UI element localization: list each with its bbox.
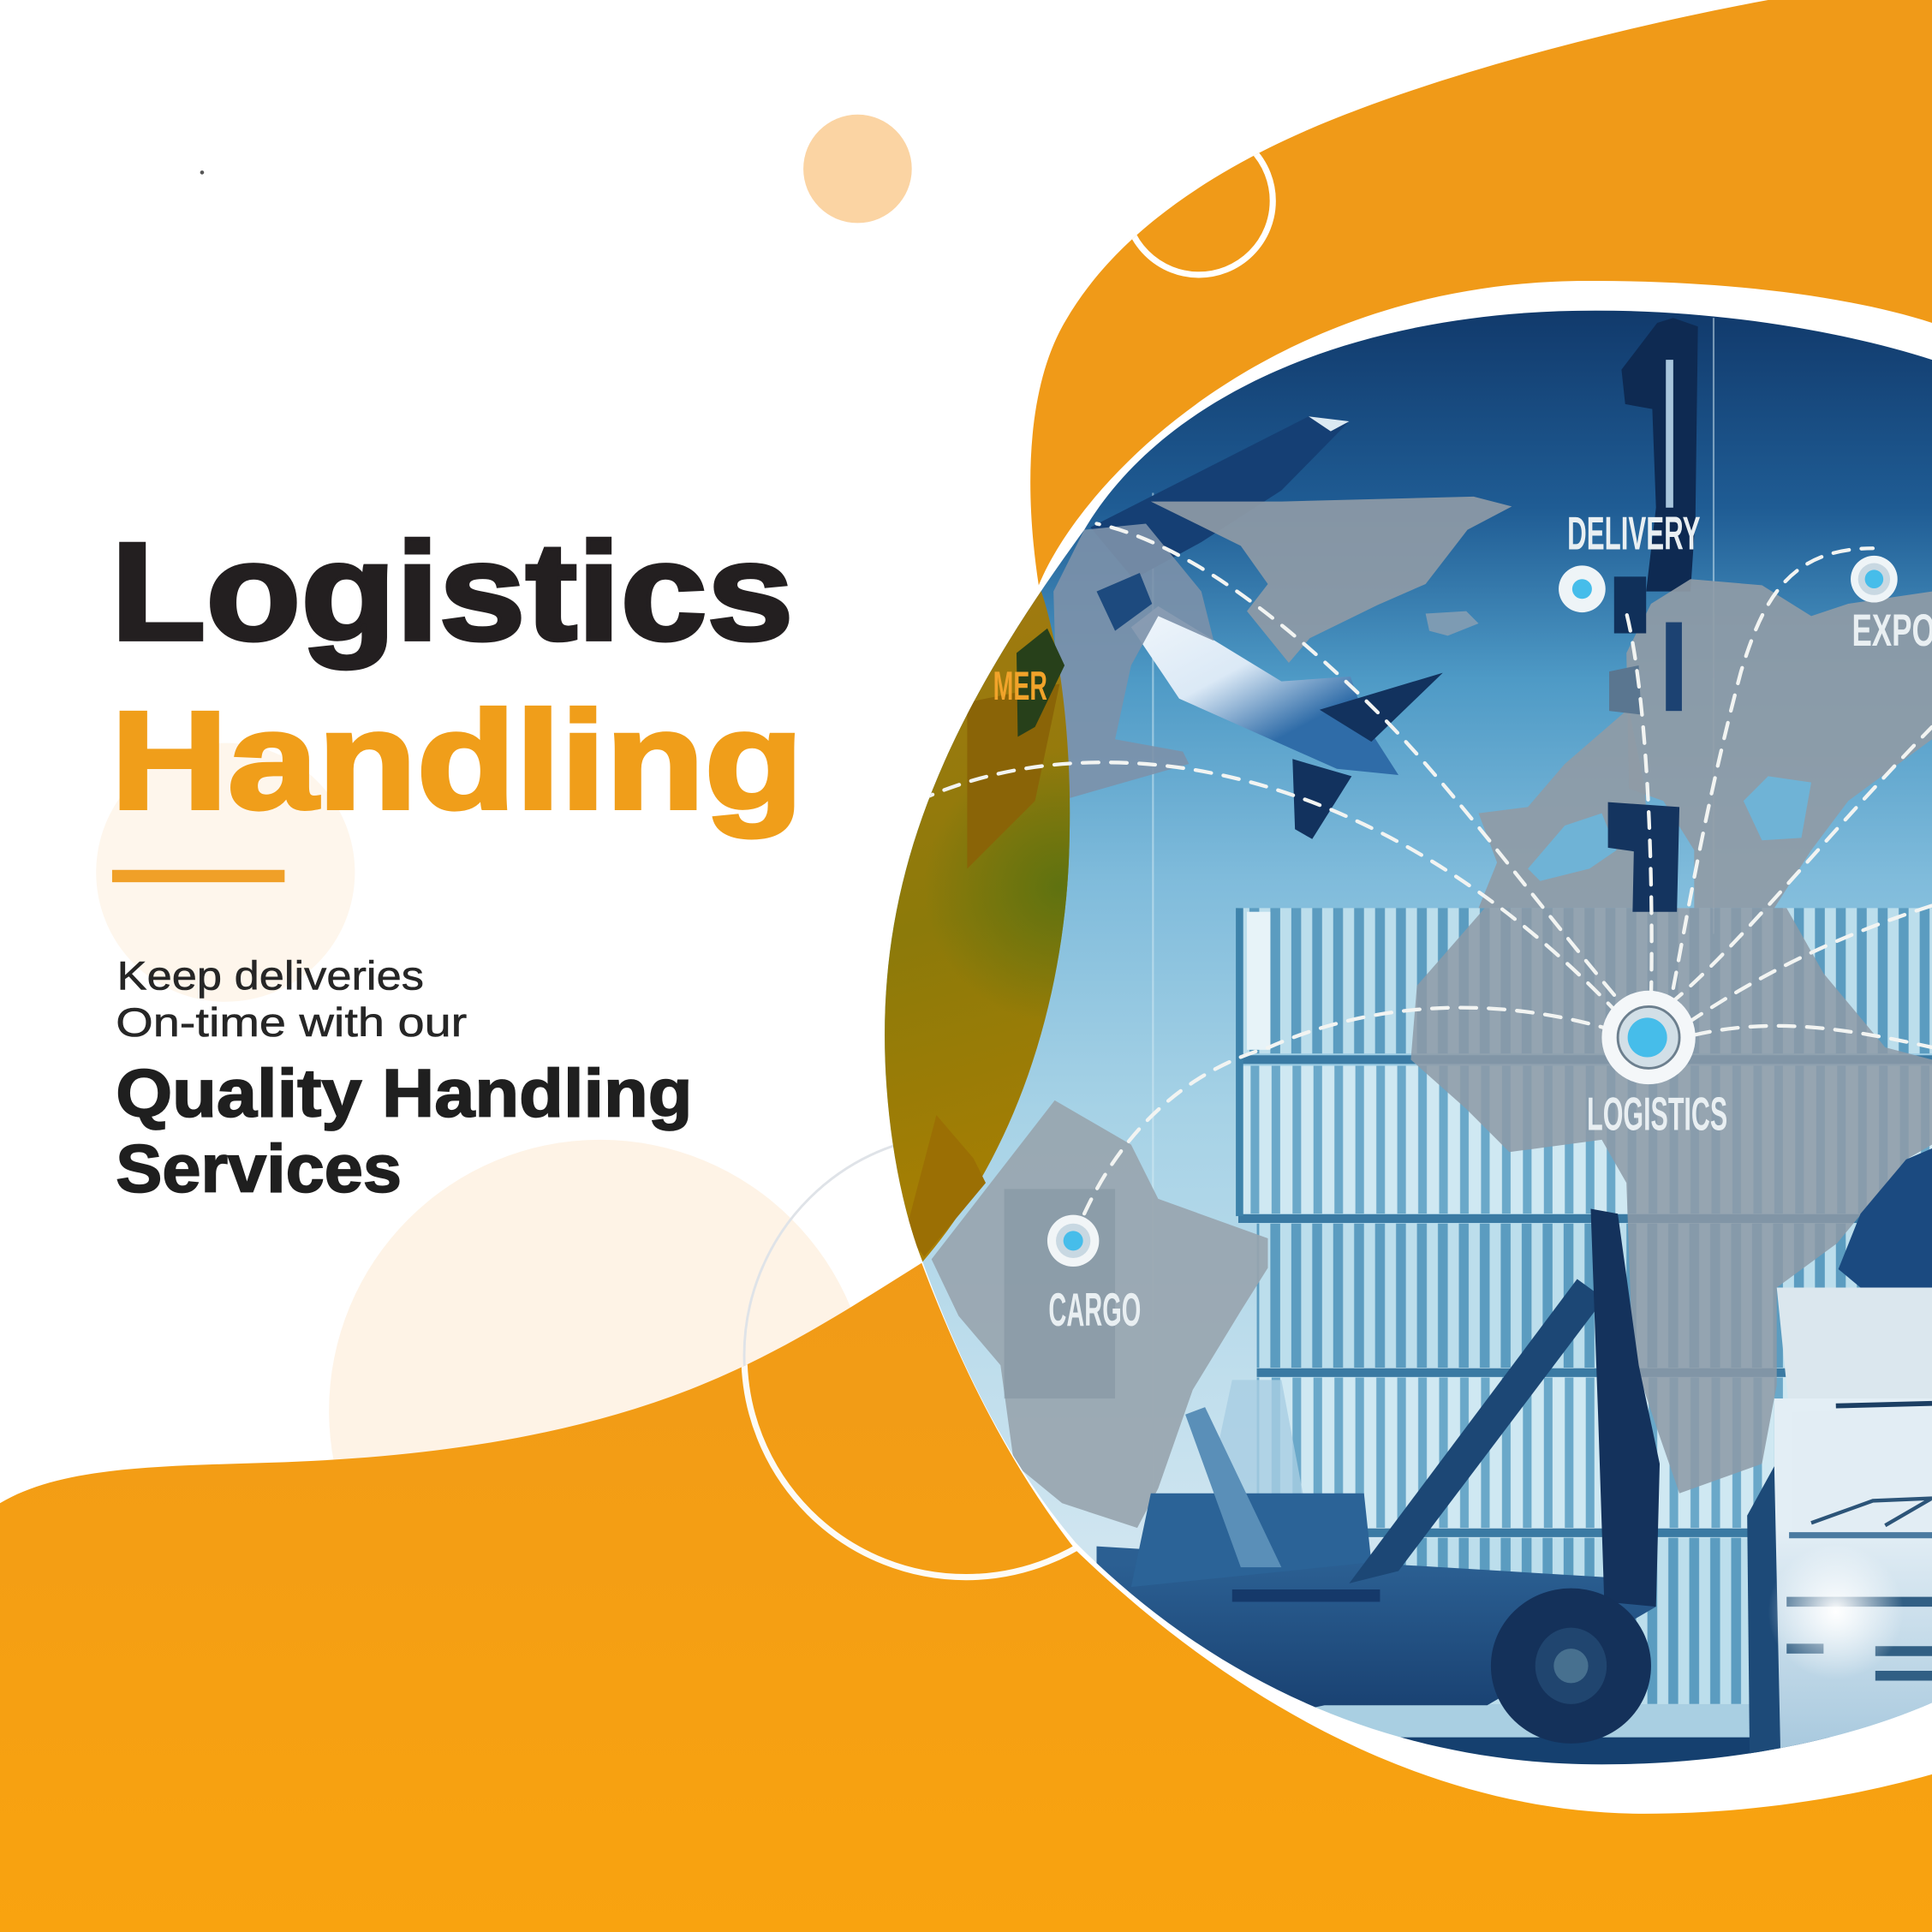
sea: mediterranean <box>1528 814 1617 881</box>
container row 3 <box>1257 1223 1860 1368</box>
forklift base <box>1097 1547 1656 1725</box>
hub dot <box>1628 1017 1667 1057</box>
building in south america <box>1005 1189 1115 1398</box>
airplane <box>1053 416 1443 839</box>
ring <box>1056 1224 1090 1258</box>
ground light strip <box>1309 1704 1929 1738</box>
continent: asia <box>1626 579 1932 908</box>
decorative circle: pale behind rule <box>96 743 355 1002</box>
container row 5 <box>1392 1538 1762 1704</box>
truck bumper <box>1789 1533 1932 1537</box>
disc <box>1559 565 1606 612</box>
dark blue container <box>1839 1148 1932 1288</box>
truck window <box>1792 1409 1932 1533</box>
disc <box>1851 556 1898 603</box>
text: keep deliveries: Keep deliveries <box>117 953 424 999</box>
mast highlight <box>1666 360 1673 508</box>
mast section mid left <box>1609 665 1641 714</box>
panel: logistics photo collage <box>862 295 1932 1774</box>
continent: africa <box>1410 908 1932 1494</box>
sea: caspian <box>1744 776 1811 840</box>
sky <box>862 295 1932 1774</box>
title: Logistics: Logistics <box>110 515 794 670</box>
container row 4 <box>1257 1377 1788 1528</box>
crane mast upper <box>1621 318 1714 934</box>
ground dark strip <box>1401 1737 1829 1764</box>
ring: bottom white on orange <box>742 1364 1077 1581</box>
plane upper wing <box>1090 416 1349 579</box>
label: cargo: CARGO <box>1048 1284 1141 1336</box>
olive lens overlay <box>862 579 1070 1263</box>
hub centre <box>1553 1649 1589 1683</box>
lens green tint <box>862 579 1070 1263</box>
route lines <box>918 523 1932 1213</box>
lens plane dark patch <box>1017 629 1064 736</box>
plane wing tip <box>1309 416 1349 432</box>
container row 1 <box>1238 908 1932 1053</box>
route north east <box>1670 727 1932 1005</box>
truck side <box>1747 1466 1780 1756</box>
hub ring <box>1618 1006 1679 1068</box>
island <box>1426 611 1479 635</box>
plane lower stabilizer <box>1292 759 1351 839</box>
wheel <box>1491 1589 1651 1744</box>
base step <box>1232 1589 1380 1601</box>
text: quality handling: Quality Handling <box>116 1055 693 1131</box>
marker: logistics hub <box>1601 991 1696 1084</box>
mast top <box>1621 318 1698 592</box>
truck wipers <box>1811 1499 1932 1525</box>
route east <box>1688 906 1932 1023</box>
white border around photo <box>885 281 1932 1814</box>
container door <box>1247 912 1270 1050</box>
forklift cab <box>1131 1494 1371 1587</box>
truck <box>1747 1288 1932 1768</box>
plane engine shade <box>1097 573 1152 631</box>
vertical hairline <box>1152 493 1154 1190</box>
mast <box>1590 1208 1660 1607</box>
continent: south america <box>932 1100 1267 1528</box>
continent: west europe <box>1479 708 1651 908</box>
forklift <box>1097 1208 1660 1744</box>
text: on-time: On-time with our <box>116 1000 468 1046</box>
decorative circle: peach <box>803 115 912 223</box>
lens coast <box>906 1115 986 1257</box>
decorative circle: pale large <box>329 1140 871 1682</box>
marker: export <box>1851 556 1898 603</box>
plane tail fin <box>1320 673 1443 742</box>
continent: north <box>1151 497 1512 663</box>
disc <box>1047 1215 1099 1267</box>
container joints <box>1238 1059 1932 1533</box>
truck grille <box>1786 1601 1932 1676</box>
mast hairline <box>1713 318 1714 934</box>
mast section mid right <box>1666 623 1682 711</box>
mast section upper left <box>1614 576 1646 634</box>
text: services: Services <box>116 1130 402 1206</box>
container left edge <box>1236 908 1243 1216</box>
windshield <box>1213 1380 1303 1565</box>
route west <box>918 762 1626 1023</box>
dot <box>1064 1231 1083 1250</box>
lens dark continent <box>967 684 1059 868</box>
world map continents <box>932 497 1932 1528</box>
ring <box>1858 564 1890 595</box>
decorative ring: thin outline <box>744 1134 1188 1577</box>
cab frame <box>1185 1407 1281 1567</box>
mast section at europe <box>1608 802 1679 912</box>
marker: delivery <box>1559 565 1606 612</box>
label: logistics: LOGISTICS <box>1587 1088 1727 1140</box>
orange shape: bottom wave <box>0 1263 1932 1932</box>
lens customer label: MER <box>993 664 1047 709</box>
route cargo <box>1084 1008 1608 1213</box>
speck <box>200 170 204 175</box>
crane mast lower <box>1608 576 1682 912</box>
route export <box>1673 548 1873 988</box>
label: delivery: DELIVERY <box>1567 508 1701 560</box>
accent rule <box>112 870 284 882</box>
plane fuselage <box>1131 606 1398 775</box>
boom arm <box>1349 1279 1604 1583</box>
madagascar <box>1868 1303 1895 1417</box>
route north west <box>1097 523 1632 1017</box>
truck window top frame <box>1836 1404 1932 1406</box>
container row 2 <box>1238 1066 1932 1213</box>
truck cab top <box>1777 1288 1932 1410</box>
truck headlight <box>1768 1544 1904 1679</box>
dot <box>1572 579 1592 599</box>
plane wreck area map overlay <box>1053 523 1213 801</box>
route delivery <box>1624 604 1652 998</box>
hub disc <box>1601 991 1696 1084</box>
dot <box>1865 569 1883 588</box>
ground <box>1309 1704 1929 1764</box>
marker: cargo <box>1047 1215 1099 1267</box>
lens fill <box>862 579 1070 1263</box>
container stack <box>1236 908 1932 1704</box>
tire <box>1491 1589 1651 1744</box>
title: Handling: Handling <box>110 683 803 838</box>
ring: top white on orange <box>1132 152 1276 277</box>
truck body <box>1774 1398 1932 1768</box>
route far east <box>1694 1026 1932 1047</box>
orange shape: top right <box>1030 0 1932 585</box>
hub <box>1535 1628 1607 1704</box>
